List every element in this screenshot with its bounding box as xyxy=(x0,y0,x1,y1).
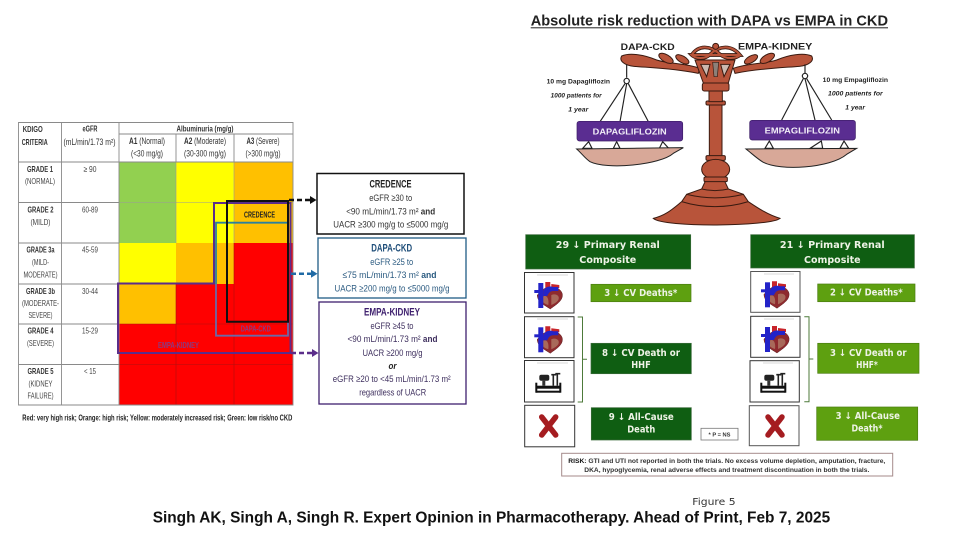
trial overlay: CREDENCE outline xyxy=(227,201,288,322)
outcome: 3 CV deaths: 3 ↓ CV Deaths* xyxy=(604,288,677,299)
outcome: 3 all-cause death: 3 ↓ All-Cause xyxy=(836,411,900,422)
icon: X, all-cause death xyxy=(525,405,575,447)
table header text: A3 (Severe) xyxy=(246,136,280,146)
icon: heart, CV deaths xyxy=(524,272,574,313)
dose note: empagliflozin: 1 year xyxy=(845,106,866,112)
balance scale xyxy=(577,43,857,225)
icon: hospital bed xyxy=(750,361,799,402)
grade row labels: FAILURE) xyxy=(28,391,54,401)
outcome: 3 CV death or HHF: HHF* xyxy=(856,360,878,371)
risk note xyxy=(562,453,893,476)
icon: heart, CV deaths xyxy=(751,272,800,312)
KDIGO table panel xyxy=(18,122,293,422)
risk heat map grid xyxy=(119,162,293,405)
table header text: (mL/min/1.73 m²) xyxy=(64,137,116,147)
table header text: (30-300 mg/g) xyxy=(184,149,226,159)
grade row labels: GRADE 3a xyxy=(26,245,55,255)
grade row labels: GRADE 2 xyxy=(28,205,54,215)
primary renal composite: DAPA: Composite xyxy=(579,255,636,266)
outcome: 9 all-cause death xyxy=(591,408,691,440)
outcome: 2 CV deaths xyxy=(818,284,915,302)
outcome: 3 CV death or HHF: 3 ↓ CV Death or xyxy=(830,348,907,359)
primary renal composite: DAPA xyxy=(526,235,691,269)
grade row labels: GRADE 4 xyxy=(28,326,54,336)
outcome: 2 CV deaths: 2 ↓ CV Deaths* xyxy=(830,288,903,299)
panel: EMPA-KIDNEY criteria xyxy=(319,302,466,404)
grade row labels: SEVERE) xyxy=(28,310,53,320)
table header text: Albuminuria (mg/g) xyxy=(176,124,234,134)
table header text: eGFR xyxy=(82,124,98,134)
overlay label: CREDENCE: CREDENCE xyxy=(244,210,275,220)
citation: Singh AK, Singh A, Singh R. Expert Opinion in Pharmacotherapy. Ahead of Print, Feb 7, 2025 xyxy=(153,510,830,526)
primary renal composite: EMPA: 21 ↓ Primary Renal xyxy=(780,240,885,251)
table header text: KDIGO xyxy=(23,124,43,134)
grade row labels xyxy=(22,164,98,401)
bracket xyxy=(804,317,813,402)
label: DAPA-CKD arm: DAPA-CKD xyxy=(621,42,675,52)
arrow: DAPA-CKD xyxy=(291,270,318,278)
P value note xyxy=(701,428,738,440)
dose note: empagliflozin: 10 mg Empagliflozin xyxy=(823,78,888,84)
trial overlay: EMPA-KIDNEY outline xyxy=(118,203,290,353)
drug label: empagliflozin: EMPAGLIFLOZIN xyxy=(765,125,840,135)
grade row labels: MODERATE) xyxy=(24,270,58,280)
icon: heart, CV death or HHF xyxy=(524,317,574,358)
panel: CREDENCE criteria: eGFR ≥30 to xyxy=(369,193,412,204)
table header text: A2 (Moderate) xyxy=(184,136,226,146)
outcome: 3 all-cause death: Death* xyxy=(852,424,883,435)
panel: DAPA-CKD criteria: DAPA-CKD xyxy=(371,243,412,255)
icon: hospital bed xyxy=(524,360,574,402)
table header text: (<30 mg/g) xyxy=(131,149,163,159)
panel: EMPA outcomes xyxy=(749,235,919,446)
grade row labels: 15-29 xyxy=(82,326,98,336)
grade row labels: (NORMAL) xyxy=(25,176,55,186)
grade row labels: (SEVERE) xyxy=(27,338,54,348)
primary renal composite: EMPA: Composite xyxy=(804,255,861,266)
risk note: RISK: GTI and UTI not reported in both the trials. No excess volume depletion, amputation, fracture, xyxy=(568,458,885,465)
grade row labels: 45-59 xyxy=(82,245,98,255)
dose note: dapagliflozin: 10 mg Dapagliflozin xyxy=(547,79,610,85)
icon: X, all-cause death xyxy=(749,406,799,446)
scale base xyxy=(653,178,780,225)
grade row labels: 60-89 xyxy=(82,205,98,215)
scale beam and crown xyxy=(621,43,812,83)
grade row labels: (MODERATE- xyxy=(22,298,59,308)
label: EMPA-KIDNEY arm: EMPA-KIDNEY xyxy=(738,41,812,51)
panel: CREDENCE criteria xyxy=(317,174,464,234)
right pan xyxy=(746,148,857,167)
panel: CREDENCE criteria: UACR ≥300 mg/g to ≤5000 mg/g xyxy=(333,220,448,231)
panel: DAPA-CKD criteria: UACR ≥200 mg/g to ≤5000 mg/g xyxy=(334,284,450,295)
dose note: dapagliflozin: 1000 patients for xyxy=(551,93,602,99)
grade row labels: ≥ 90 xyxy=(84,164,97,174)
outcome: 8 CV death or HHF xyxy=(591,343,691,374)
panel: DAPA outcomes xyxy=(524,235,691,447)
overlay label: DAPA-CKD: DAPA-CKD xyxy=(241,324,271,334)
risk note: DKA, hypoglycemia, renal adverse effects and treatment discontinuation in both the trials. xyxy=(584,467,869,474)
grade row labels: (MILD- xyxy=(32,257,49,267)
figure caption: Figure 5 xyxy=(692,497,736,508)
outcome: 8 CV death or HHF: 8 ↓ CV Death or xyxy=(602,348,680,359)
table header text: (>300 mg/g) xyxy=(246,149,280,159)
grade row labels: GRADE 1 xyxy=(27,164,53,174)
left chains xyxy=(583,64,669,148)
grade row labels: GRADE 3b xyxy=(26,286,55,296)
panel: EMPA-KIDNEY criteria: <90 mL/min/1.73 m² and xyxy=(348,334,438,345)
overlay label: EMPA-KIDNEY: EMPA-KIDNEY xyxy=(158,340,199,350)
arrow: CREDENCE xyxy=(289,196,316,204)
grade row labels: (MILD) xyxy=(30,217,51,227)
dose note: dapagliflozin xyxy=(547,79,610,113)
outcome: 3 all-cause death xyxy=(817,407,918,440)
primary renal composite: EMPA xyxy=(751,235,914,268)
panel: EMPA-KIDNEY criteria: eGFR ≥45 to xyxy=(370,321,414,332)
panel: EMPA-KIDNEY criteria: eGFR ≥20 to <45 mL/min/1.73 m² xyxy=(333,374,451,385)
trial overlay: DAPA-CKD outline xyxy=(216,223,288,336)
outcome: 8 CV death or HHF: HHF xyxy=(631,360,651,371)
title: Absolute risk reduction with DAPA vs EMPA in CKD xyxy=(531,13,888,30)
icon: heart, CV death or HHF xyxy=(751,316,800,357)
panel: EMPA-KIDNEY criteria: or xyxy=(388,361,398,372)
panel: DAPA-CKD criteria xyxy=(318,238,466,298)
panel: CREDENCE criteria: <90 mL/min/1.73 m² and xyxy=(346,206,435,217)
dose note: empagliflozin: 1000 patients for xyxy=(828,92,883,98)
right chains xyxy=(765,64,849,148)
dose note: dapagliflozin: 1 year xyxy=(568,107,589,113)
panel: DAPA-CKD criteria: ≤75 mL/min/1.73 m² and xyxy=(342,270,437,281)
panel: DAPA-CKD criteria: eGFR ≥25 to xyxy=(370,257,413,268)
drug label: empagliflozin xyxy=(750,120,855,140)
drug label: dapagliflozin xyxy=(577,121,683,141)
panel: EMPA-KIDNEY criteria: UACR ≥200 mg/g xyxy=(362,348,422,359)
grade row labels: GRADE 5 xyxy=(28,366,54,376)
panel: EMPA-KIDNEY criteria: regardless of UACR xyxy=(359,388,426,399)
grade row labels: 30-44 xyxy=(82,286,98,296)
outcome: 9 all-cause death: 9 ↓ All-Cause xyxy=(609,412,674,423)
grade row labels: (KIDNEY xyxy=(28,379,53,389)
risk colour legend: Red: very high risk; Orange: high risk; Yellow: moderately increased risk; Green: low risk/no CKD xyxy=(22,412,292,422)
left pan xyxy=(577,148,683,166)
table header text: A1 (Normal) xyxy=(129,136,165,146)
dose note: empagliflozin xyxy=(823,78,888,112)
grade row labels: < 15 xyxy=(84,366,96,376)
P value note: * P = NS xyxy=(708,432,731,438)
drug label: dapagliflozin: DAPAGLIFLOZIN xyxy=(593,126,667,136)
bracket xyxy=(578,317,587,402)
panel: EMPA-KIDNEY criteria: EMPA-KIDNEY xyxy=(364,307,420,319)
arrow: EMPA-KIDNEY xyxy=(291,349,318,357)
outcome: 3 CV deaths xyxy=(591,284,691,302)
table header text: CRITERIA xyxy=(22,137,48,147)
primary renal composite: DAPA: 29 ↓ Primary Renal xyxy=(556,240,660,251)
panel: CREDENCE criteria: CREDENCE xyxy=(370,179,412,191)
outcome: 3 CV death or HHF xyxy=(818,343,919,373)
table header text xyxy=(22,124,280,159)
scale column xyxy=(702,83,730,182)
outcome: 9 all-cause death: Death xyxy=(627,425,656,436)
